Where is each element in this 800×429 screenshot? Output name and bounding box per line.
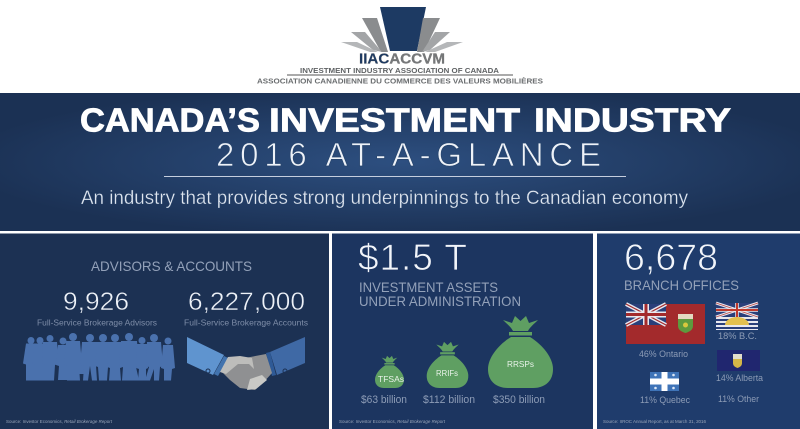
assets heading: INVESTMENT ASSETS — [359, 279, 498, 295]
bag label: RRSPs — [507, 359, 534, 369]
advisors number: 9,926 — [63, 288, 129, 316]
RRSPs value: $350 billion — [493, 394, 545, 406]
bag label: RRIFs — [436, 368, 458, 378]
flag: Alberta — [717, 350, 760, 371]
source note: Source: Investor Economics, Retail Brokerage Report — [6, 419, 113, 425]
bag label: TFSAs — [378, 374, 404, 384]
assets heading — [359, 279, 521, 309]
panel: investment assets — [332, 234, 593, 429]
title: INDUSTRY — [534, 102, 731, 138]
Alberta label: 14% Alberta — [716, 373, 764, 384]
tagline: An industry that provides strong underpinnings to the Canadian economy — [81, 187, 688, 209]
panel heading: ADVISORS & ACCOUNTS — [91, 258, 252, 274]
Other label: 11% Other — [718, 394, 759, 405]
flag: Ontario — [626, 304, 705, 344]
BC label: 18% B.C. — [718, 331, 757, 342]
icon: crowd of people — [23, 333, 175, 380]
subtitle: 2016 AT-A-GLANCE — [216, 136, 601, 173]
branch heading: BRANCH OFFICES — [624, 277, 739, 293]
title: INVESTMENT — [269, 102, 520, 138]
logo wordmark: IIACACCVM — [359, 52, 445, 68]
Ontario label: 46% Ontario — [639, 349, 688, 360]
assets heading: UNDER ADMINISTRATION — [359, 293, 521, 309]
flag: British Columbia — [716, 303, 758, 330]
logo english name: INVESTMENT INDUSTRY ASSOCIATION OF CANADA — [300, 66, 500, 75]
logo mark — [341, 7, 463, 52]
panel: branch offices — [597, 234, 800, 429]
panel: header banner — [0, 93, 800, 231]
advisors label: Full-Service Brokerage Advisors — [37, 318, 158, 328]
logo — [257, 7, 543, 86]
icon: handshake — [187, 337, 305, 390]
title: CANADA’S — [80, 102, 260, 138]
RRIFs value: $112 billion — [423, 394, 475, 406]
source note: Source: Investor Economics, Retail Brokerage Report — [339, 419, 446, 425]
icon: RRSPs money bag — [488, 316, 553, 388]
TFSAs value: $63 billion — [361, 394, 407, 406]
source note: Source: IIROC Annual Report, as at March 31, 2016 — [603, 419, 706, 425]
icon: RRIFs money bag — [427, 342, 468, 388]
Quebec label: 11% Quebec — [640, 395, 690, 406]
icon: TFSAs money bag — [375, 356, 404, 388]
logo french name: ASSOCIATION CANADIENNE DU COMMERCE DES VALEURS MOBILIÈRES — [257, 76, 543, 86]
branch number: 6,678 — [624, 237, 718, 278]
assets number: $1.5 T — [358, 237, 467, 278]
accounts label: Full-Service Brokerage Accounts — [184, 318, 309, 328]
panel: advisors and accounts — [0, 234, 329, 429]
accounts number: 6,227,000 — [188, 288, 305, 316]
flag: Quebec — [650, 372, 679, 391]
title — [80, 102, 731, 138]
